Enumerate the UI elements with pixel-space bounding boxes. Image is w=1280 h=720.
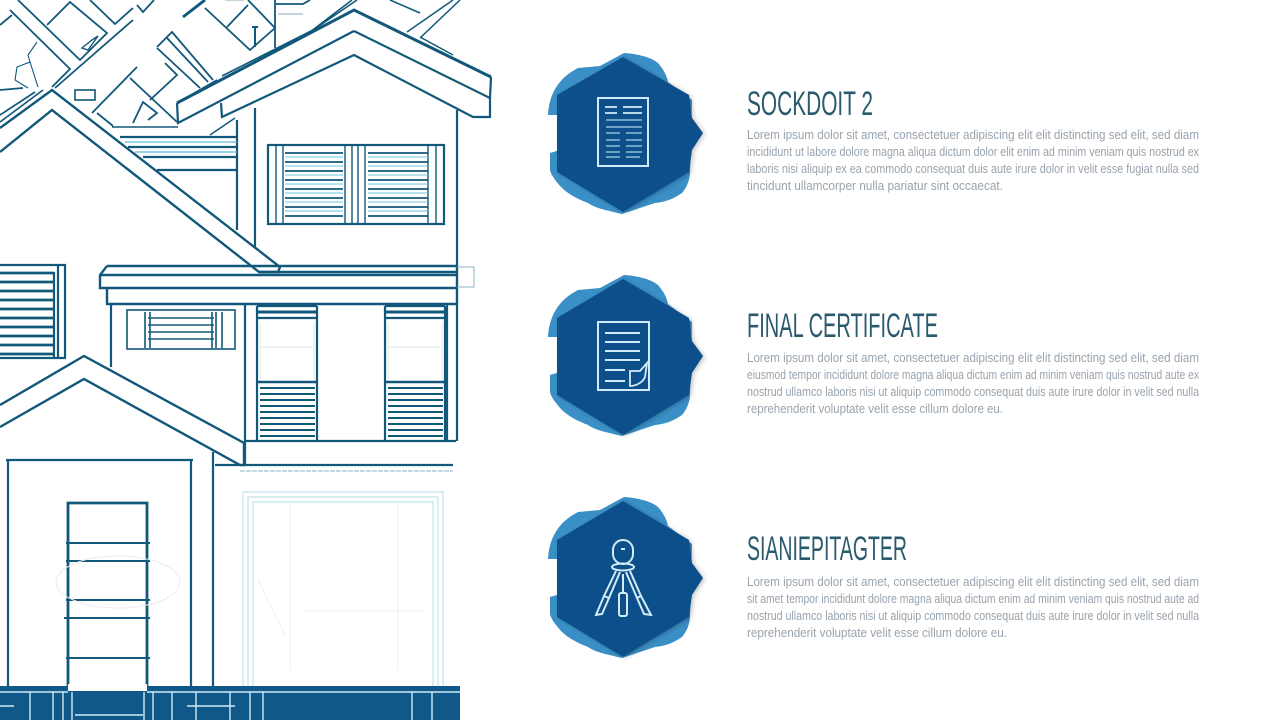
faint garage door: [243, 492, 443, 686]
first floor walls: [111, 304, 457, 441]
louvre band behind roof: [120, 137, 237, 170]
hexagon: [557, 279, 703, 435]
window three: [385, 306, 445, 441]
heading: SIANIEPITAGTER: [747, 530, 907, 568]
body text: Lorem ipsum dolor sit amet, consectetuer adipiscing elit elit distincting sed elit, sed diam: [747, 350, 1199, 365]
blob: [548, 275, 692, 436]
upper window: [268, 145, 444, 224]
body text: [747, 127, 1199, 193]
garage walls: [6, 452, 213, 686]
heading: FINAL CERTIFICATE: [747, 307, 938, 345]
heading: SOCKDOIT 2: [747, 85, 873, 123]
main gable roof: [0, 90, 280, 272]
left window: [0, 265, 65, 358]
step two: icon badge: [548, 275, 1200, 436]
blob: [548, 53, 692, 214]
icon: document: [598, 98, 648, 166]
blob: [548, 497, 692, 658]
upper walls: [237, 108, 457, 267]
upper gable roof: [177, 10, 491, 123]
body text: [747, 574, 1200, 640]
middle window: [127, 310, 235, 349]
icon: certificate: [598, 322, 649, 390]
house blueprint illustration: [0, 0, 491, 720]
ledge: [215, 441, 456, 465]
hexagon: [557, 57, 703, 212]
lower gable roof: [0, 356, 244, 465]
hexagon: [557, 501, 703, 657]
roof plan drawing: [0, 0, 460, 135]
body text: Lorem ipsum dolor sit amet, consectetuer adipiscing elit elit distincting sed elit, sed diam: [747, 574, 1199, 589]
body text: [747, 350, 1200, 416]
body text: tincidunt ullamcorper nulla pariatur sint occaecat.: [747, 178, 1003, 193]
step one: icon badge: [548, 53, 1199, 214]
window two: [257, 306, 317, 441]
entrance door: [56, 503, 180, 690]
body text: reprehenderit voluptate velit esse cillum dolore eu.: [747, 401, 1003, 416]
icon: surveying tripod: [596, 540, 651, 616]
step three: icon badge: [548, 497, 1200, 658]
body text: laboris nisi aliquip ex ea commodo consequat duis aute irure dolor in velit esse fugiat nulla sed: [747, 161, 1199, 176]
body text: reprehenderit voluptate velit esse cillum dolore eu.: [747, 625, 1007, 640]
body text: Lorem ipsum dolor sit amet, consectetuer adipiscing elit elit distincting sed elit, sed diam: [747, 127, 1199, 142]
floor band: [100, 266, 474, 304]
foundation: [0, 684, 460, 720]
